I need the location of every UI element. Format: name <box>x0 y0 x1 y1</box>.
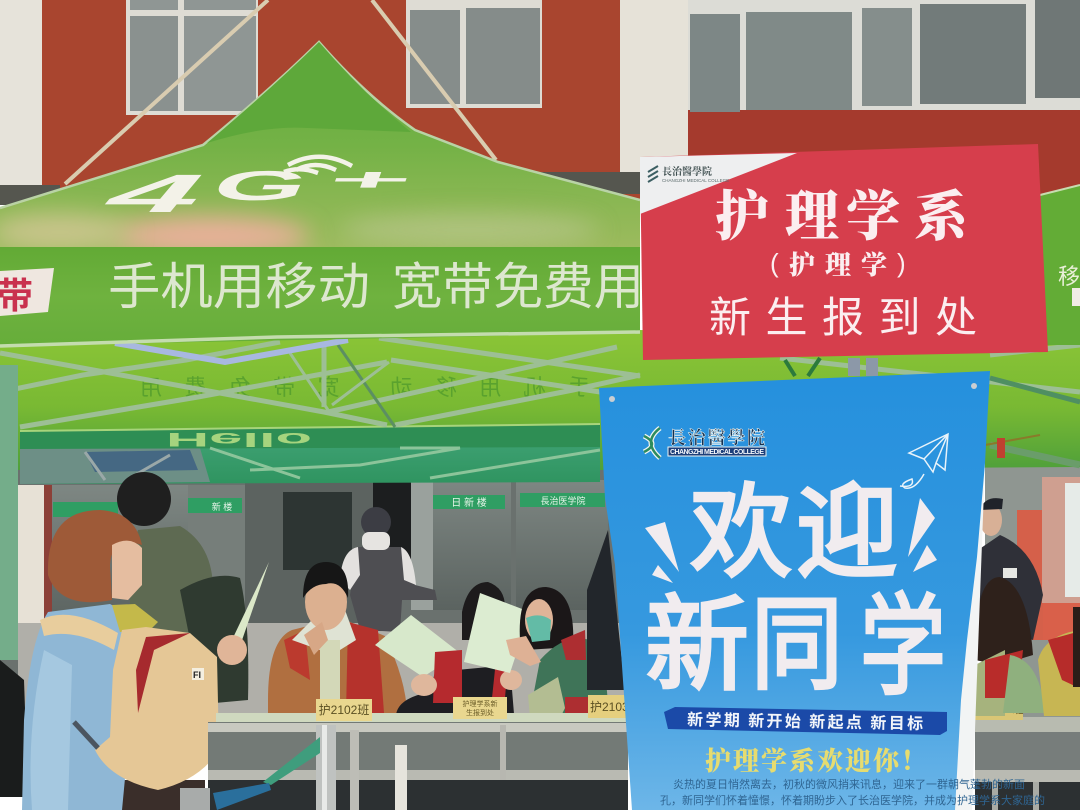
sign subtitle: 学 <box>861 251 887 280</box>
name card 3: 护2103 <box>590 700 629 714</box>
name card 2102 <box>316 699 372 721</box>
roof logo 4G+: + <box>324 162 418 197</box>
backpack: FI <box>193 670 201 680</box>
hand <box>217 635 247 665</box>
ground floor entrance behind booth: 日 新 楼 <box>451 496 487 509</box>
name card 2104: 护2104班 <box>977 702 1023 716</box>
roof logo 4G+: G <box>204 162 318 209</box>
ground floor entrance behind booth: 長治医学院 <box>540 495 586 506</box>
ground floor entrance behind booth <box>0 470 640 723</box>
sign title: 护 <box>715 187 769 247</box>
windows <box>126 0 1080 115</box>
slogan text: 手机用移动 <box>108 247 370 319</box>
name card 2: 护理学系新 <box>462 699 498 708</box>
blue stanchion belt <box>213 783 271 810</box>
headline 欢迎: 欢 <box>690 451 792 598</box>
people at left <box>0 472 625 810</box>
college logo small: 長治醫學院 <box>662 165 712 178</box>
right side staff <box>975 498 1080 716</box>
building background <box>0 0 1080 205</box>
sign title: 理 <box>785 187 839 247</box>
seated man in red vest <box>268 562 407 713</box>
headline 欢迎: 迎 <box>796 451 898 598</box>
sign title: 学 <box>846 187 900 247</box>
tent underside and frame: Hello <box>166 428 312 450</box>
seated woman two <box>506 587 608 713</box>
tent cables <box>65 0 496 184</box>
name card 2104 <box>973 698 1023 720</box>
dark person at banner edge <box>587 530 625 690</box>
right side background <box>985 465 1080 730</box>
banner college logo: CHANGZHI MEDICAL COLLEGE <box>670 449 764 456</box>
headline 新同学: 同 <box>751 561 843 709</box>
roof sunlight tint <box>0 214 600 256</box>
roof logo 4G+: 4 <box>86 164 227 224</box>
plastic bag <box>528 677 565 718</box>
banner college logo <box>644 428 766 458</box>
tent underside and frame <box>0 330 1080 660</box>
sign title: 系 <box>914 187 970 247</box>
body paragraph <box>660 777 1045 807</box>
headline 新同学 <box>645 559 946 717</box>
college logo small: CHANGZHI MEDICAL COLLEGE <box>662 178 729 183</box>
name card 2 <box>453 697 507 719</box>
right tent segment <box>1040 185 1080 345</box>
peak panel <box>207 42 411 143</box>
girl with backpack <box>0 510 247 810</box>
paper held low <box>375 615 460 677</box>
sign subtitle <box>770 248 906 280</box>
banner college logo: 長治醫學院 <box>668 428 765 448</box>
headline 新同学: 学 <box>860 559 946 717</box>
welcome line: 护理学系欢迎你！ <box>705 746 927 776</box>
sign posts <box>785 358 878 376</box>
icon: paper plane <box>900 434 948 488</box>
tent valance with slogan <box>0 247 644 346</box>
name card 3 <box>588 695 629 718</box>
sign subtitle: ) <box>897 248 906 278</box>
sign subtitle: 理 <box>825 251 851 280</box>
red badge <box>0 267 54 319</box>
name card 2102: 护2102班 <box>319 703 369 717</box>
body paragraph: 炎热的夏日悄然离去，初秋的微风捎来讯息，迎来了一群朝气蓬勃的新面 <box>673 777 1025 791</box>
standing man with cap <box>978 498 1043 640</box>
ground floor entrance behind booth: 新 楼 <box>212 501 232 512</box>
college logo small <box>648 165 729 183</box>
name card 2: 生报到处 <box>466 708 494 717</box>
paper in hand <box>231 562 269 646</box>
blue welcome banner <box>599 371 1045 810</box>
red signboard <box>640 144 1048 360</box>
seated woman right <box>975 577 1045 716</box>
paper raised <box>464 593 530 673</box>
sign subtitle: 护 <box>789 250 815 280</box>
decorative triangles <box>645 498 937 583</box>
seated person far right <box>1038 607 1080 716</box>
stanchion post <box>180 725 336 810</box>
tent valance with slogan: 宽带免费用 <box>392 247 644 319</box>
right tent segment: 移 <box>1058 264 1080 289</box>
grommets <box>609 396 615 402</box>
headline 欢迎 <box>690 451 898 598</box>
slogan strip: 新学期 新开始 新起点 新目标 <box>687 706 923 734</box>
standing person behind <box>340 507 437 632</box>
sign subtitle: ( <box>770 248 779 278</box>
headline 新同学: 新 <box>645 560 749 711</box>
body paragraph: 孔，新同学们怀着憧憬，怀着期盼步入了长治医学院，并成为护理学系大家庭的 <box>660 793 1045 807</box>
backpack <box>40 615 219 790</box>
sign label: 新生报到处 <box>709 284 977 345</box>
tent roof <box>0 42 640 256</box>
person: back turned man <box>117 472 248 703</box>
green stanchion belt <box>263 737 320 785</box>
roof logo 4G+ <box>86 157 418 224</box>
tent underside and frame: 手机用移动 宽带免费用 <box>140 375 590 400</box>
registration table <box>180 695 1080 810</box>
seated woman one <box>396 582 522 715</box>
